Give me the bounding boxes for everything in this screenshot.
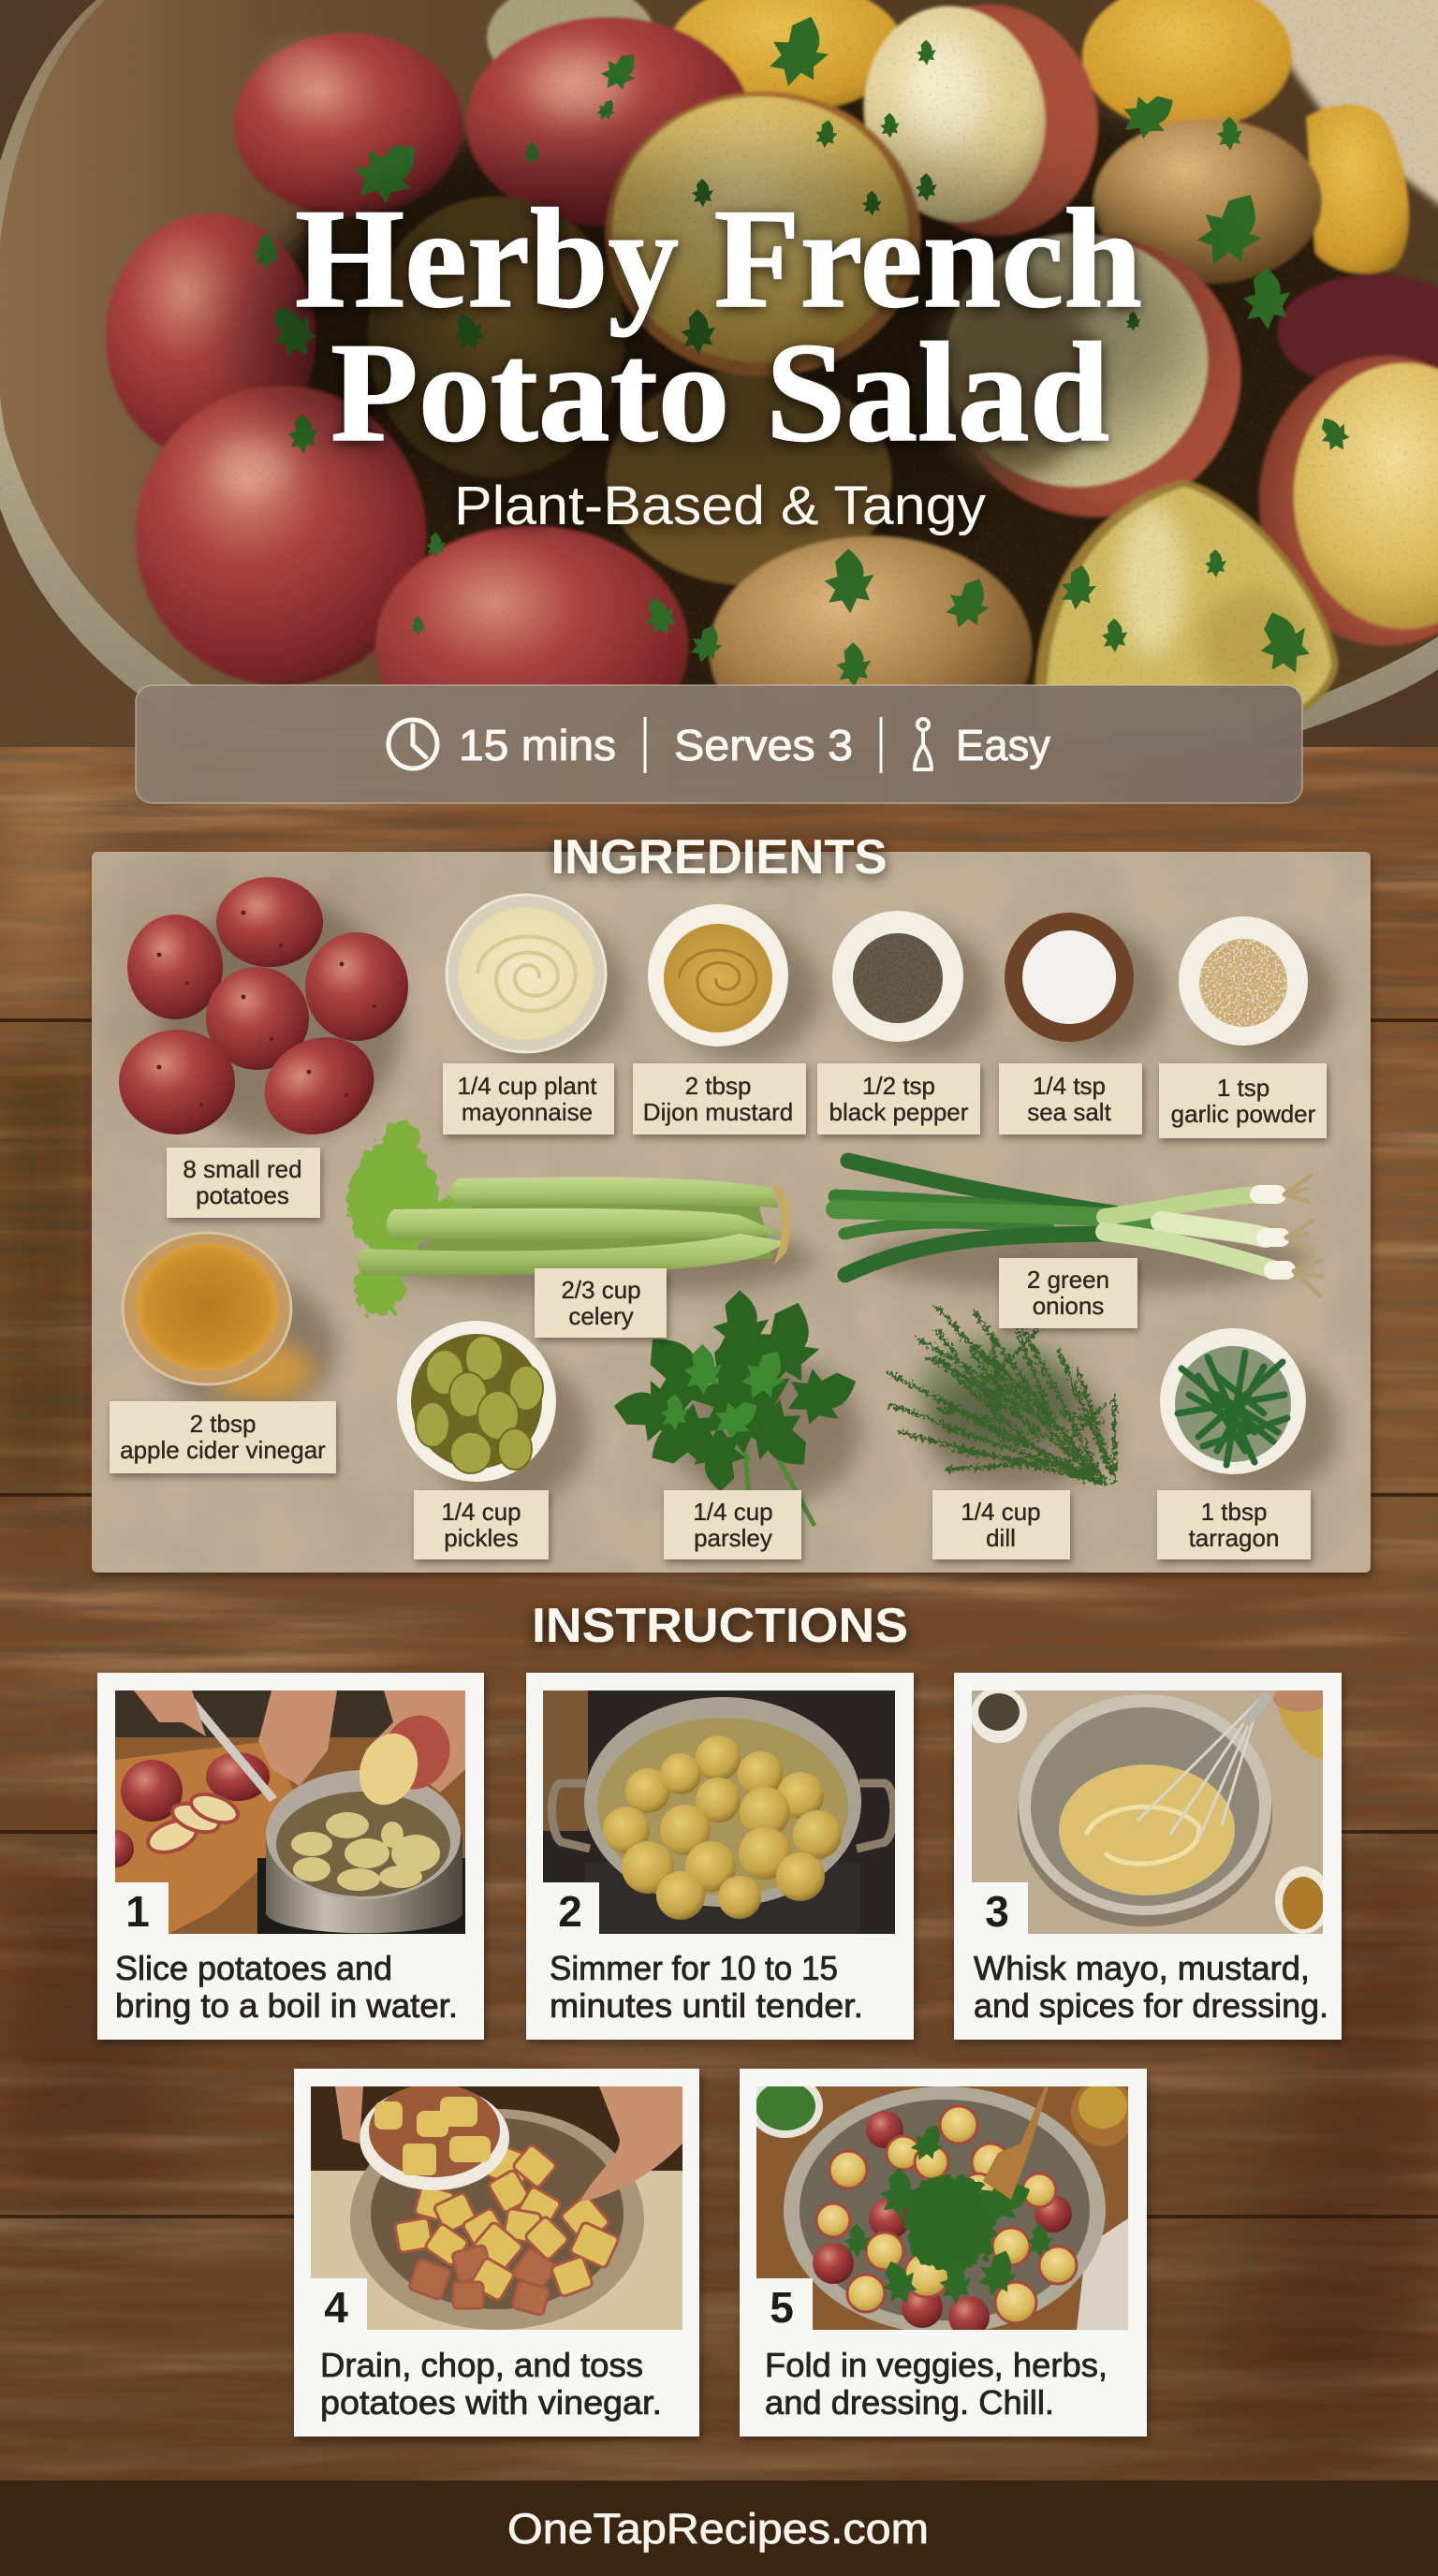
- label: celery: 2/3 cup: [561, 1276, 641, 1304]
- mayonnaise bowl: [447, 895, 606, 1052]
- step 1 number: 1: [125, 1887, 150, 1936]
- dill: [885, 1306, 1114, 1484]
- label: celery: celery: [568, 1302, 634, 1330]
- label: garlic powder: 1 tsp: [1217, 1074, 1269, 1102]
- label: potatoes: potatoes: [196, 1181, 289, 1209]
- label: garlic powder: garlic powder: [1171, 1100, 1316, 1128]
- step 4 photo: [311, 2084, 682, 2330]
- label: parsley: parsley: [694, 1524, 772, 1552]
- label: apple cider vinegar: 2 tbsp: [190, 1410, 256, 1438]
- step 3 text: Whisk mayo, mustard,: [974, 1949, 1310, 1987]
- label: black pepper: black pepper: [829, 1098, 969, 1126]
- step 1 card: [96, 1673, 484, 2040]
- instructions heading: INSTRUCTIONS: [532, 1599, 908, 1653]
- garlic powder bowl: [1179, 916, 1308, 1046]
- step 1 number: [115, 1882, 169, 1936]
- step 5 text: Fold in veggies, herbs,: [765, 2346, 1108, 2384]
- step 3 photo: [971, 1686, 1331, 1934]
- difficulty: Easy: [956, 721, 1050, 769]
- prep time: 15 mins: [459, 721, 616, 769]
- mustard bowl: [648, 904, 788, 1046]
- divider: [880, 717, 882, 773]
- title: [295, 180, 1142, 471]
- red potatoes: [119, 877, 408, 1152]
- step 5 number: 5: [770, 2283, 794, 2332]
- green onions: [835, 1161, 1322, 1295]
- step 3 number: [972, 1882, 1028, 1936]
- subtitle: Plant-Based & Tangy: [454, 476, 986, 536]
- hero photo: bowl of potatoes: [0, 0, 1438, 766]
- step 5 text: and dressing. Chill.: [765, 2383, 1054, 2422]
- step 4 text: potatoes with vinegar.: [320, 2383, 662, 2422]
- title: Herby French: [295, 180, 1142, 337]
- step 2 text: Simmer for 10 to 15: [550, 1949, 838, 1987]
- label: dill: dill: [986, 1524, 1016, 1552]
- label: apple cider vinegar: apple cider vinegar: [120, 1436, 326, 1464]
- step 1 photo: [96, 1690, 465, 1934]
- label: parsley: 1/4 cup: [693, 1498, 773, 1526]
- label: sea salt: 1/4 tsp: [1033, 1072, 1106, 1100]
- title: Potato Salad: [330, 314, 1109, 471]
- label: potatoes: 8 small red: [183, 1155, 302, 1183]
- label: sea salt: sea salt: [1027, 1098, 1112, 1126]
- ingredient labels: [110, 1063, 1327, 1559]
- step 2 card: [526, 1673, 914, 2040]
- tarragon bowl: [1160, 1328, 1306, 1474]
- step 2 text: minutes until tender.: [550, 1986, 863, 2025]
- step 1 text: Slice potatoes and: [115, 1949, 392, 1987]
- label: dill: 1/4 cup: [961, 1498, 1041, 1526]
- label: tarragon: tarragon: [1189, 1524, 1279, 1552]
- pepper bowl: [832, 911, 963, 1042]
- step 1 text: bring to a boil in water.: [115, 1986, 458, 2025]
- pickles bowl: [397, 1321, 556, 1482]
- step 4 card: [294, 2069, 699, 2437]
- step 4 number: [311, 2278, 367, 2332]
- herb flecks: [253, 7, 1356, 687]
- label: tarragon: 1 tbsp: [1201, 1498, 1267, 1526]
- step 3 text: and spices for dressing.: [974, 1986, 1328, 2025]
- step 4 number: 4: [324, 2283, 348, 2332]
- ceramic bowl: [0, 0, 1438, 749]
- step 2 number: 2: [558, 1887, 582, 1936]
- footer: [0, 2481, 1438, 2576]
- potatoes: [106, 0, 1438, 766]
- icon: clock: [389, 720, 437, 768]
- step 4 text: Drain, chop, and toss: [320, 2346, 643, 2384]
- parsley: [609, 1290, 866, 1526]
- label: green onions: 2 green: [1027, 1266, 1109, 1294]
- label: pickles: pickles: [444, 1524, 519, 1552]
- salt bowl: [1005, 913, 1134, 1042]
- divider: [644, 717, 646, 773]
- step 5 number: [756, 2278, 813, 2332]
- step 5 photo: [748, 2074, 1135, 2337]
- apple cider vinegar bowl: [123, 1233, 314, 1401]
- step 5 card: [740, 2069, 1147, 2437]
- servings: Serves 3: [674, 721, 853, 769]
- label: black pepper: 1/2 tsp: [862, 1072, 935, 1100]
- ingredients heading: INGREDIENTS: [550, 830, 888, 885]
- step 2 photo: [543, 1690, 895, 1934]
- step 3 card: [954, 1673, 1342, 2040]
- label: mayonnaise: 1/4 cup plant: [458, 1072, 597, 1100]
- info bar: [136, 685, 1302, 803]
- celery: [348, 1121, 790, 1315]
- skin speckle texture: [160, 0, 1438, 698]
- icon: whisk: [915, 719, 932, 769]
- cast shadows on the board: [159, 899, 1339, 1507]
- label: Dijon mustard: Dijon mustard: [643, 1098, 793, 1126]
- label: green onions: onions: [1033, 1292, 1104, 1320]
- ingredients board: [92, 852, 1371, 1573]
- label: pickles: 1/4 cup: [441, 1498, 521, 1526]
- website: OneTapRecipes.com: [507, 2505, 929, 2553]
- label: Dijon mustard: 2 tbsp: [685, 1072, 751, 1100]
- step 2 number: [543, 1882, 599, 1936]
- label: mayonnaise: mayonnaise: [462, 1098, 593, 1126]
- step 3 number: 3: [985, 1887, 1009, 1936]
- table planks beneath the bowl: [0, 509, 137, 747]
